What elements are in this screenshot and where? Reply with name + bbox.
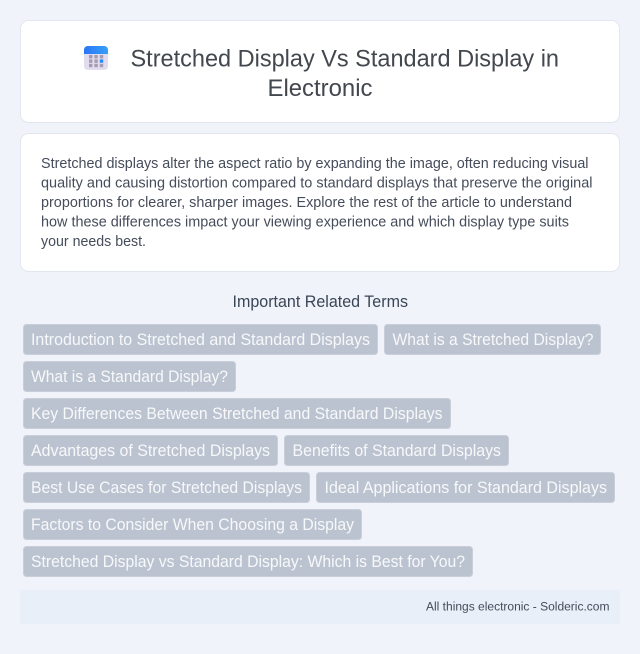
- chip: factors: [24, 510, 362, 540]
- chip: key differences: [24, 398, 450, 428]
- chip: which is best: Stretched Display vs Standard Display: Which is Best for You?: [31, 553, 465, 571]
- chip: standard display: What is a Standard Display?: [31, 368, 228, 386]
- chip: best use cases: [24, 472, 310, 502]
- chip: introduction: [24, 324, 378, 354]
- chip: ideal applications: Ideal Applications for Standard Displays: [324, 479, 607, 497]
- chip: stretched display: What is a Stretched Display?: [392, 331, 594, 349]
- icon: calendar grid: [84, 46, 108, 70]
- chip: ideal applications: [316, 472, 614, 502]
- chip: advantages: [24, 436, 278, 466]
- summary text: how these differences impact your viewing experience and which display type suits: [41, 214, 569, 230]
- chip: best use cases: Best Use Cases for Stretched Displays: [31, 479, 302, 497]
- panel: title card: [20, 20, 620, 122]
- chip: standard display: [24, 362, 236, 392]
- chip: which is best: [24, 546, 472, 576]
- chip: benefits: [284, 436, 508, 466]
- summary text: Stretched displays alter the aspect ratio by expanding the image, often reducing visual: [41, 156, 588, 172]
- chip: advantages: Advantages of Stretched Displays: [31, 442, 270, 460]
- title: [130, 46, 559, 102]
- title: Stretched Display Vs Standard Display in: [130, 46, 559, 72]
- chip: key differences: Key Differences Between Stretched and Standard Displays: [31, 405, 442, 423]
- footer: [20, 590, 620, 624]
- title: Electronic: [268, 75, 372, 102]
- summary text: [41, 156, 592, 250]
- chip: introduction: Introduction to Stretched and Standard Displays: [31, 331, 370, 349]
- summary text: quality and causing distortion compared to standard displays that preserve the original: [41, 176, 592, 192]
- related terms chips: [24, 324, 614, 576]
- chip: benefits: Benefits of Standard Displays: [292, 442, 501, 460]
- summary text: your needs best.: [41, 234, 146, 250]
- chip: stretched display: [384, 324, 600, 354]
- panel: summary: [20, 134, 620, 272]
- summary text: proportions for clearer, sharper images. Explore the rest of the article to understand: [41, 195, 572, 211]
- heading: important related terms: Important Related Terms: [232, 293, 408, 311]
- chip: factors: Factors to Consider When Choosing a Display: [31, 516, 355, 534]
- footer: All things electronic - Solderic.com: [426, 600, 610, 614]
